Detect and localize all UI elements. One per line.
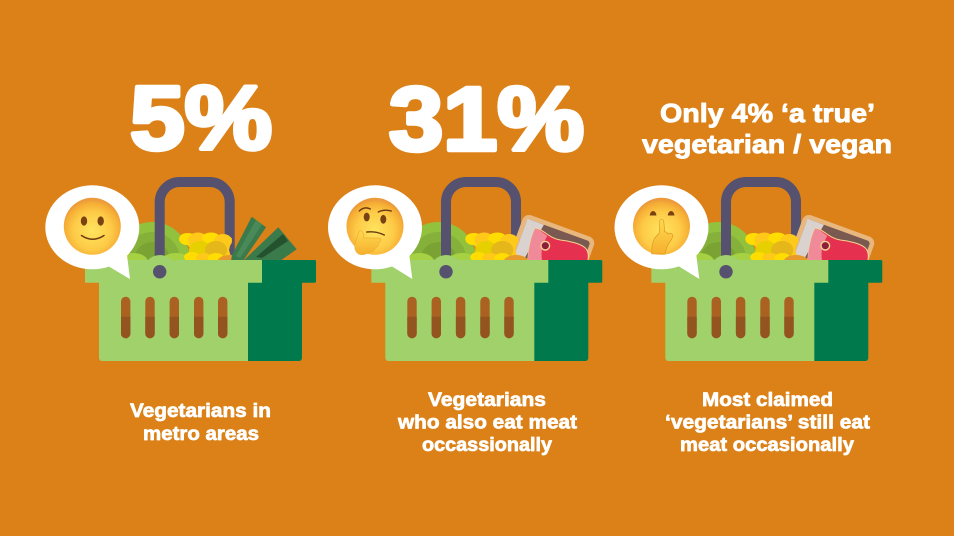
icon: shushing emoji	[633, 198, 690, 255]
basket 3: vegetables and meat	[614, 182, 882, 361]
caption: most claimed vegetarians still eat meat occasionally	[665, 390, 871, 456]
basket body and rim	[651, 255, 882, 361]
caption: most claimed vegetarians still eat meat occasionally: ‘vegetarians’ still eat	[665, 412, 871, 434]
basket slots	[687, 297, 794, 338]
stat: 5%: 5%	[130, 69, 272, 169]
heading: only 4% a true vegetarian / vegan	[642, 98, 892, 159]
speech bubble	[614, 185, 708, 279]
stat: 31%: 31%	[389, 70, 584, 170]
basket body and rim	[371, 255, 602, 361]
leek	[231, 217, 297, 261]
orange vegetable	[784, 255, 808, 269]
orange vegetable	[217, 255, 242, 269]
icon: smiling emoji	[64, 198, 121, 255]
corn	[179, 232, 232, 263]
basket slots	[407, 297, 514, 338]
basket body and rim	[85, 255, 316, 361]
basket 2: vegetables and meat	[328, 182, 602, 361]
basket handle	[726, 182, 796, 264]
lettuce	[680, 222, 757, 298]
basket slots	[121, 297, 227, 338]
basket 1: vegetables only	[45, 182, 316, 361]
basket handle	[160, 182, 230, 264]
meat tray	[782, 213, 876, 301]
speech bubble	[328, 185, 422, 279]
basket handle	[446, 182, 516, 264]
lettuce	[400, 222, 477, 298]
speech bubble	[45, 185, 139, 279]
lettuce	[114, 222, 191, 298]
caption: vegetarians who also eat meat occassionally: Vegetarians	[428, 390, 546, 411]
heading: only 4% a true vegetarian / vegan: Only 4% ‘a true’	[660, 98, 875, 128]
caption: most claimed vegetarians still eat meat occasionally: meat occasionally	[680, 435, 854, 456]
caption: vegetarians who also eat meat occassionally: occassionally	[422, 435, 552, 456]
caption: vegetarians who also eat meat occassionally	[397, 390, 578, 456]
orange vegetable	[504, 255, 528, 269]
caption: most claimed vegetarians still eat meat occasionally: Most claimed	[702, 390, 833, 411]
caption: vegetarians who also eat meat occassionally: who also eat meat	[397, 412, 578, 434]
caption: vegetarians in metro areas: Vegetarians in	[130, 401, 271, 422]
heading: only 4% a true vegetarian / vegan: vegetarian / vegan	[642, 129, 892, 159]
caption: vegetarians in metro areas	[130, 401, 271, 445]
corn	[465, 232, 518, 263]
corn	[745, 232, 798, 263]
caption: vegetarians in metro areas: metro areas	[143, 424, 259, 445]
icon: thinking emoji	[346, 198, 404, 255]
meat tray	[502, 213, 596, 301]
